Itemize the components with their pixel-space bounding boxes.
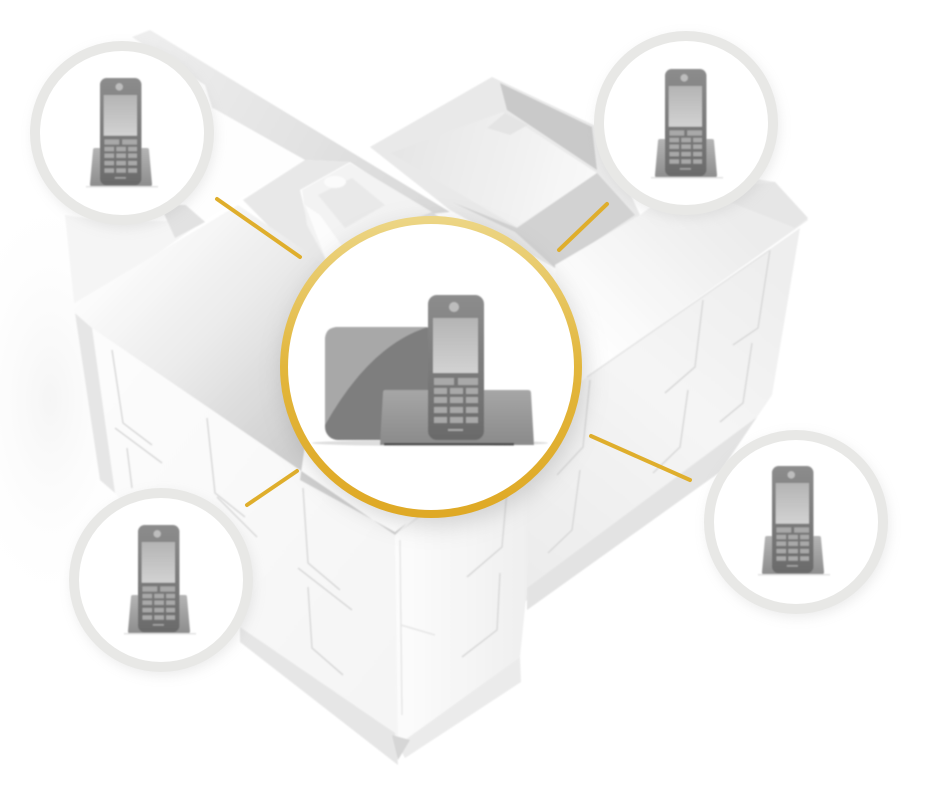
handset circle: top right [597, 36, 779, 218]
left wall edge strip [75, 313, 115, 493]
handset circle: top left [33, 46, 215, 228]
handset circle: bottom right [707, 435, 889, 617]
wall panel lines [112, 250, 770, 715]
connector: bottom right [591, 436, 690, 480]
icon: handset in dock [86, 78, 158, 188]
roof walkway [243, 160, 350, 270]
building [65, 30, 808, 765]
left wall base band [240, 627, 398, 765]
roof skylight [302, 163, 450, 262]
icon: handset in dock [124, 525, 196, 634]
left roof plane [68, 205, 407, 535]
central base station circle [283, 220, 585, 525]
background shading [0, 180, 150, 620]
right wall base band [527, 417, 757, 610]
handset circle: bottom left [72, 493, 254, 675]
pillar base band [398, 657, 521, 758]
rear left wall [65, 215, 205, 312]
diagonal roof ridge [132, 30, 450, 214]
white roof court [180, 108, 305, 221]
icon: handset in dock [758, 466, 830, 576]
icon: base station with handset [312, 295, 548, 446]
corner pillar [395, 440, 527, 745]
connector: top left [217, 199, 300, 257]
right wall [395, 228, 800, 700]
icon: handset in dock [651, 69, 723, 178]
right roof plane [555, 170, 808, 380]
connector: bottom left [247, 471, 297, 505]
pyramid roof [370, 77, 640, 268]
connector: top right [559, 204, 607, 250]
left wall [92, 328, 398, 738]
